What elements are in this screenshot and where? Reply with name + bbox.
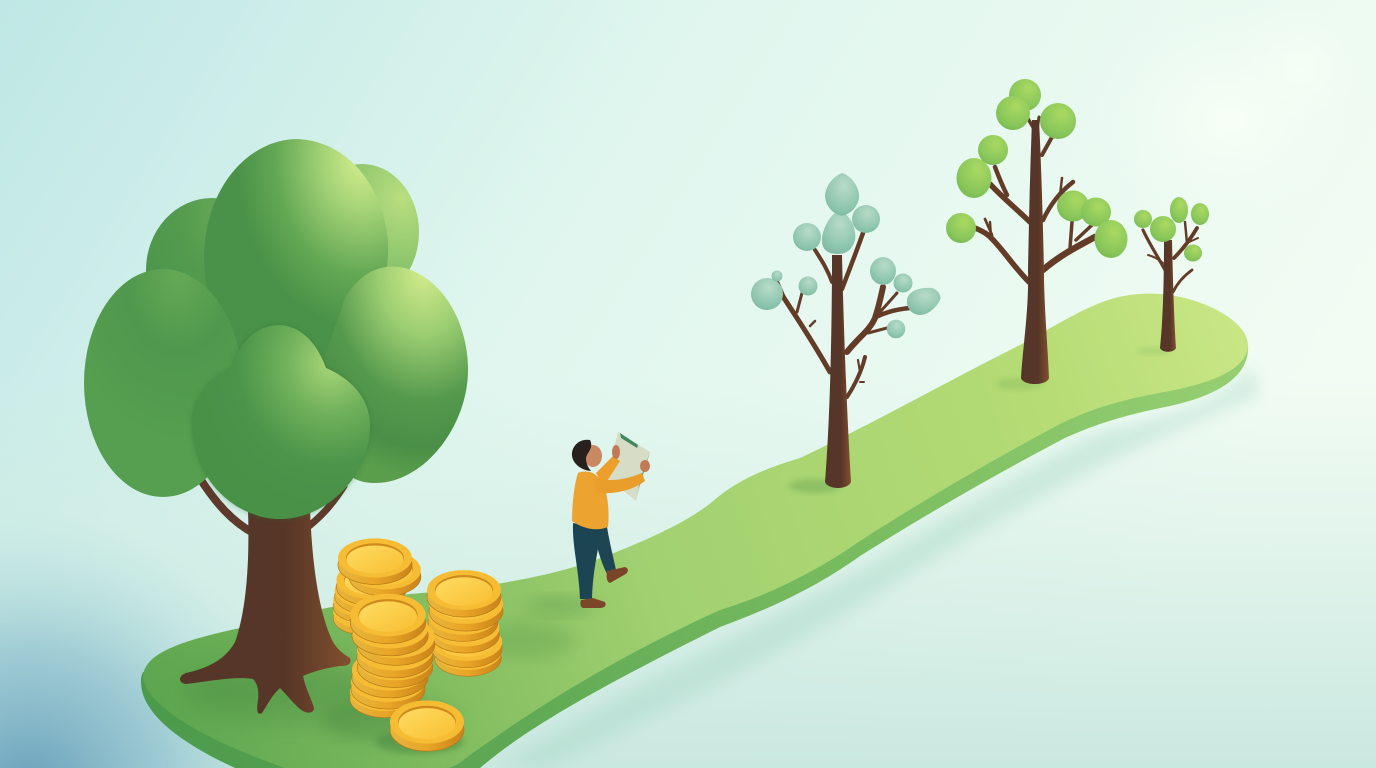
gold coin stack back — [333, 538, 421, 635]
shadow behind front lobe — [192, 325, 370, 519]
ground shadows — [180, 347, 1173, 754]
front leg — [573, 523, 601, 599]
back leg — [594, 527, 616, 574]
young teal tree — [751, 173, 941, 488]
open map — [607, 432, 650, 501]
gold coin stack front — [350, 594, 435, 718]
head — [584, 445, 602, 467]
tree branches — [199, 477, 344, 534]
path side thickness — [141, 345, 1248, 768]
tall lime tree — [946, 79, 1128, 384]
small tree trunk — [1160, 240, 1176, 352]
teal tree branches — [778, 233, 910, 397]
small tree branches — [1143, 222, 1198, 292]
small tree foliage — [1134, 197, 1209, 262]
foliage left lobe — [84, 269, 242, 497]
person reading a map — [572, 432, 650, 608]
raised arm — [596, 456, 620, 486]
tree trunk with roots — [180, 510, 351, 714]
foliage crown — [204, 139, 388, 387]
front shoe — [580, 598, 606, 608]
back shoe — [607, 567, 628, 583]
lime tree branches — [975, 117, 1095, 282]
front arm — [594, 473, 645, 493]
foliage back left — [146, 198, 278, 342]
foliage front lobe — [192, 325, 370, 519]
small lime tree — [1134, 197, 1209, 352]
lime tree trunk — [1021, 120, 1049, 384]
hair — [572, 440, 591, 471]
path top surface — [143, 294, 1248, 768]
winding green path platform — [141, 294, 1248, 768]
torso — [572, 472, 609, 529]
single gold coin — [390, 700, 464, 751]
foliage right lobe — [310, 267, 468, 483]
lime tree foliage — [946, 79, 1128, 258]
teal tree foliage — [751, 173, 941, 338]
foliage back right — [305, 164, 419, 300]
teal tree trunk — [825, 255, 851, 488]
soft shadow under the path — [500, 365, 1258, 768]
gold coin stack right — [427, 570, 503, 676]
large mature tree — [84, 139, 468, 714]
